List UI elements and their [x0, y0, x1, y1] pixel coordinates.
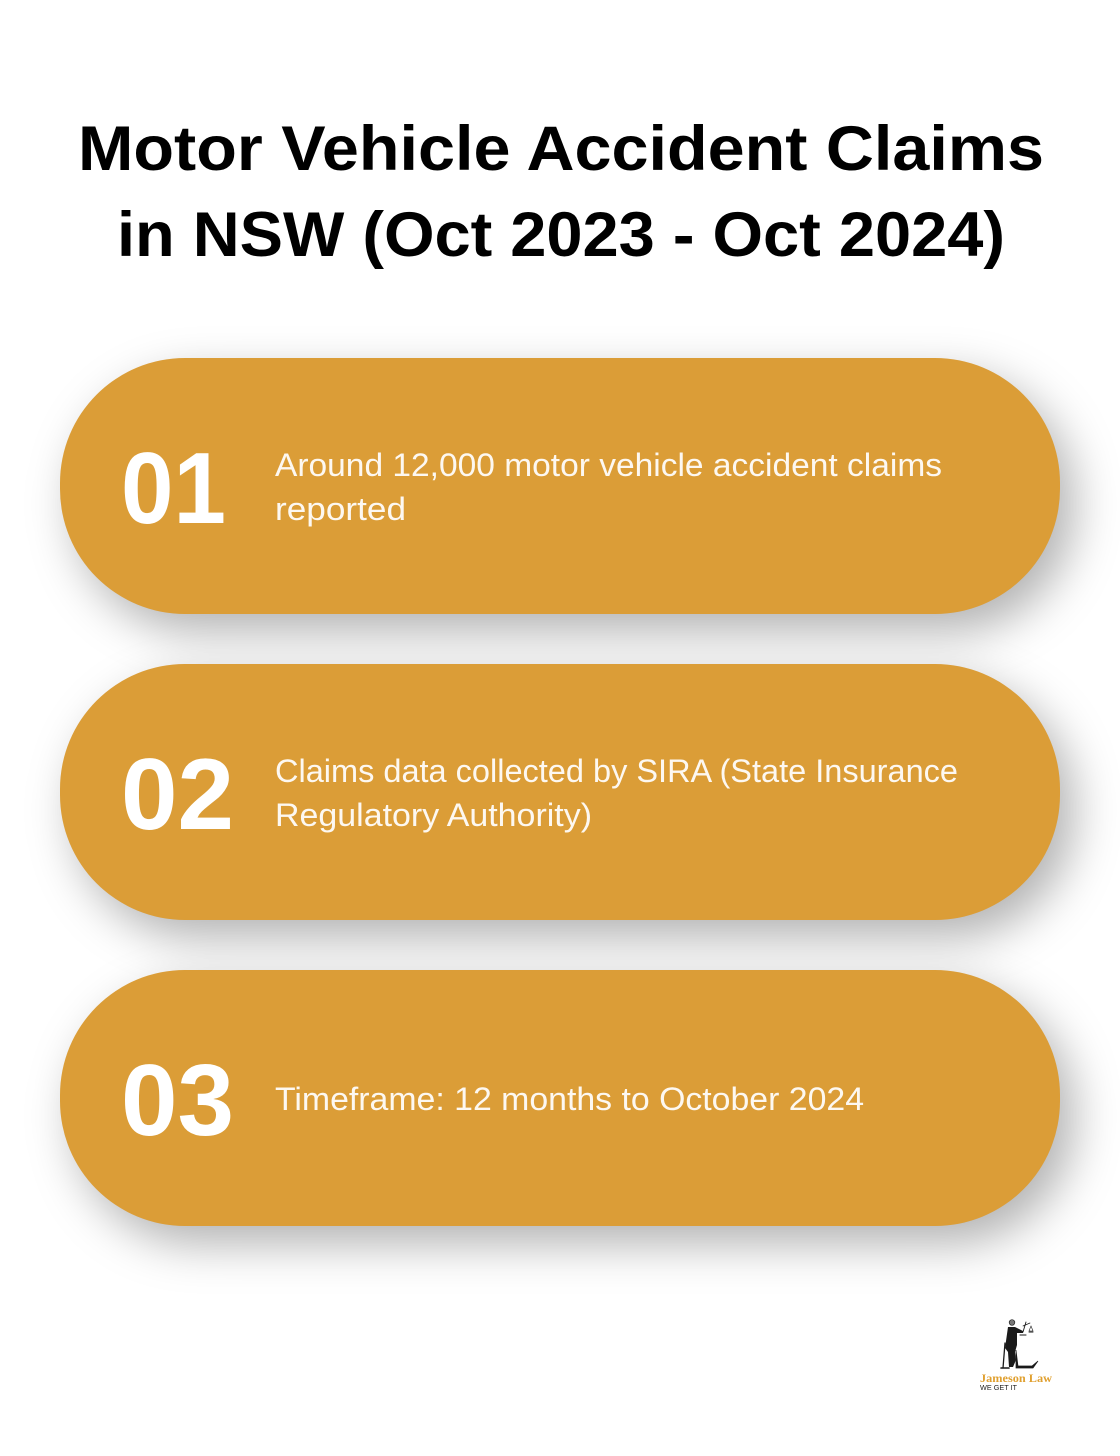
icon: lady justice [1001, 1320, 1038, 1368]
text: claim 01 description: reported [275, 491, 406, 527]
number 03: 03 [121, 1045, 234, 1157]
text: claim 02 description [275, 753, 958, 833]
panel: claim 02 [60, 664, 1074, 938]
text: claim 01 description: Around 12,000 motor vehicle accident claims [275, 447, 942, 483]
text: claim 02 description: Regulatory Authority) [275, 797, 592, 833]
number 02: 02 [121, 739, 234, 851]
logo tagline: WE GET IT [980, 1385, 1018, 1392]
number 01: 01 [121, 433, 226, 545]
title [78, 114, 1044, 270]
title: in NSW (Oct 2023 - Oct 2024) [117, 200, 1005, 270]
logo name: Jameson Law [980, 1373, 1053, 1385]
title: Motor Vehicle Accident Claims [78, 114, 1044, 184]
text: claim 02 description: Claims data collected by SIRA (State Insurance [275, 753, 958, 789]
text: claim 01 description [275, 447, 942, 527]
text: claim 03 description: Timeframe: 12 months to October 2024 [275, 1081, 864, 1117]
panel: claim 01 [60, 358, 1074, 632]
logo: Jameson Law [980, 1320, 1053, 1392]
panel: claim 03 [60, 970, 1074, 1244]
